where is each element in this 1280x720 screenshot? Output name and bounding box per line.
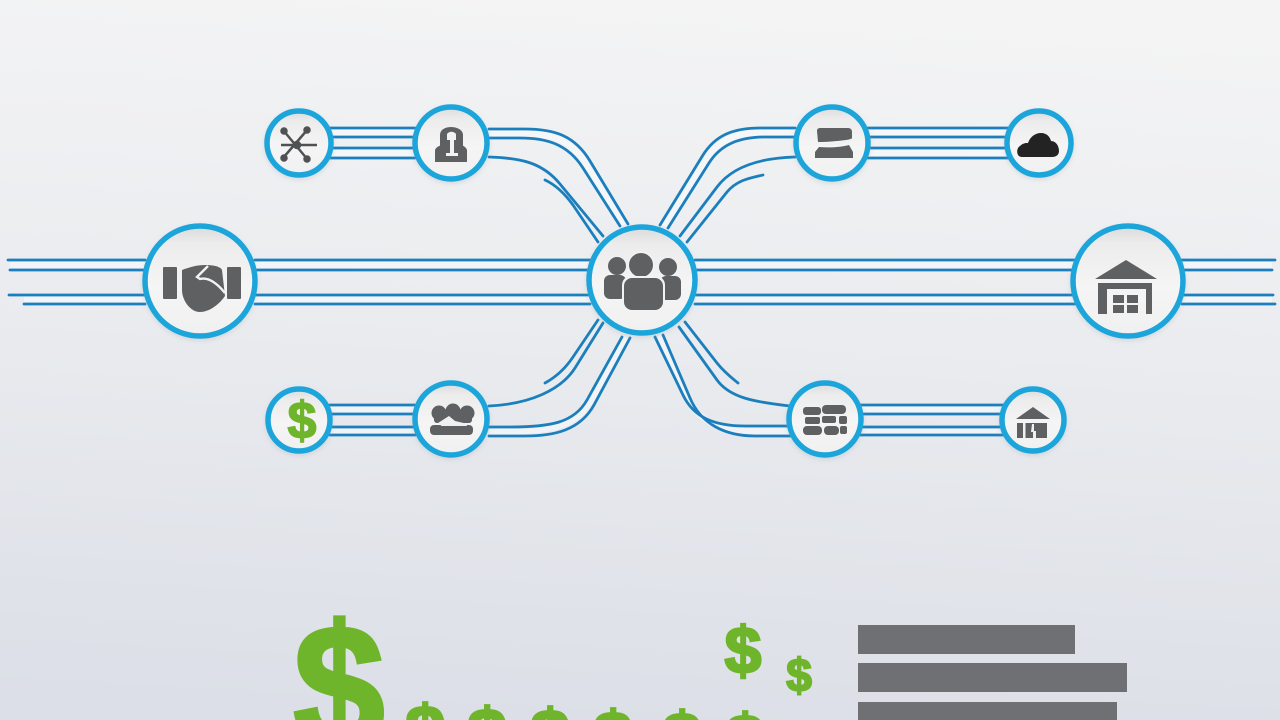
icon: team bbox=[604, 252, 681, 312]
icon: cloud bbox=[1017, 133, 1059, 157]
connectors: main horizontal lines bbox=[8, 260, 1275, 304]
icon: meeting group bbox=[430, 404, 474, 435]
connectors: top-left branch bbox=[330, 128, 628, 242]
node: cloud bbox=[1007, 111, 1071, 175]
node: network star bbox=[267, 111, 331, 175]
icon: person bbox=[435, 127, 467, 162]
node: person bbox=[415, 107, 487, 179]
connector lines bbox=[8, 128, 1275, 436]
node: bank bbox=[1002, 389, 1064, 451]
money: dollar signs bbox=[293, 590, 812, 720]
icon: sofa bbox=[815, 128, 853, 158]
connectors: top-right branch bbox=[660, 128, 1010, 242]
icon: bank bbox=[1016, 407, 1050, 438]
icon: network star bbox=[281, 128, 317, 162]
row of dollar signs bbox=[405, 692, 765, 720]
bar chart bbox=[858, 625, 1127, 720]
node: central team bbox=[589, 227, 695, 333]
icon: stacked blocks bbox=[803, 405, 847, 435]
icon: handshake bbox=[163, 265, 241, 312]
small dollar sign: $ bbox=[786, 649, 812, 701]
node: stacked blocks bbox=[789, 383, 861, 455]
node: meeting group bbox=[415, 383, 487, 455]
connectors: bottom-right branch bbox=[655, 322, 1005, 436]
connectors: bottom-left branch bbox=[330, 320, 630, 436]
node: handshake bbox=[145, 226, 255, 336]
node: warehouse bbox=[1073, 226, 1183, 336]
node: sofa bbox=[796, 107, 868, 179]
node: dollar bbox=[268, 389, 330, 451]
icon: warehouse bbox=[1095, 260, 1157, 314]
medium dollar sign: $ bbox=[725, 613, 761, 687]
icon: dollar sign: $ bbox=[288, 392, 317, 450]
